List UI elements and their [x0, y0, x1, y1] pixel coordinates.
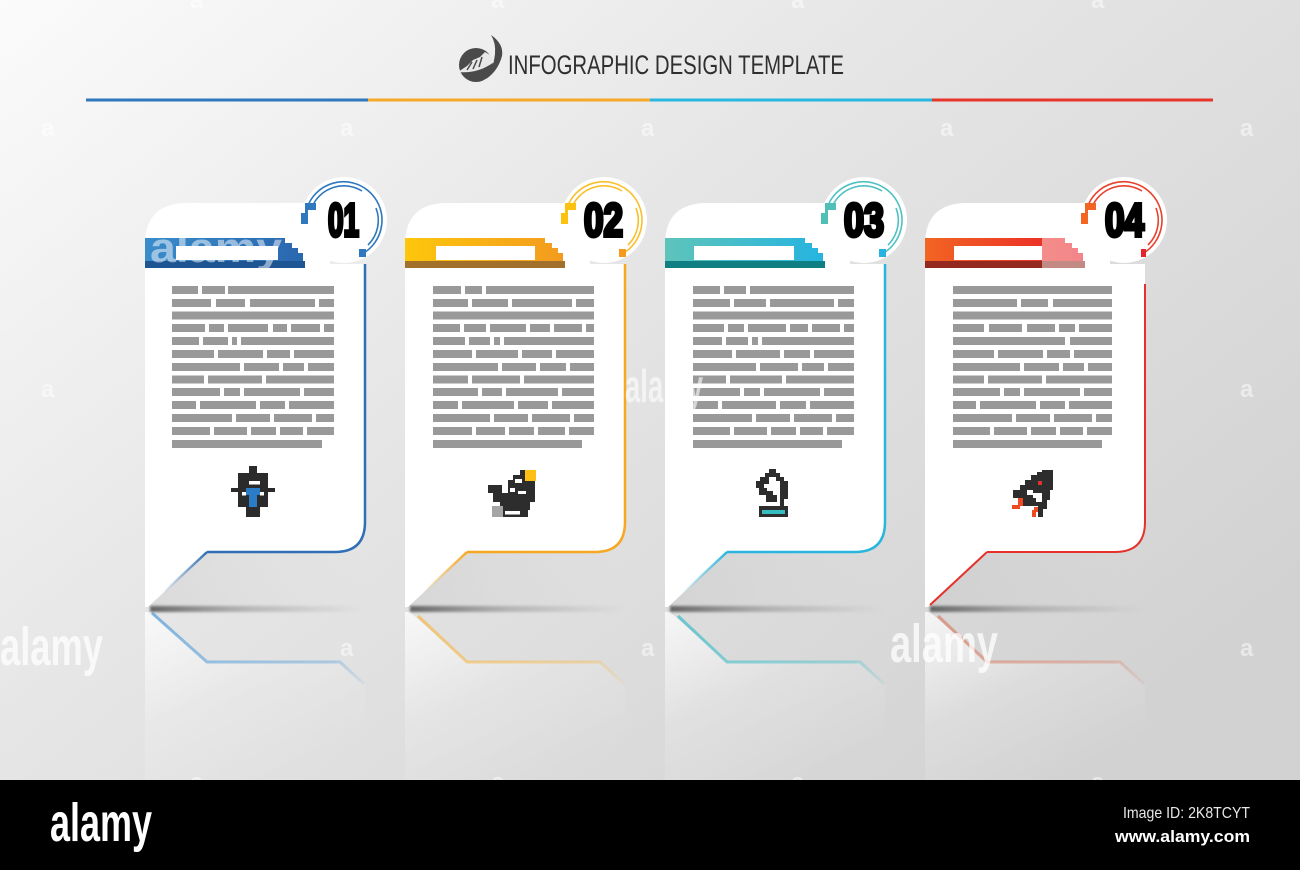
icon: chess knight — [756, 469, 788, 517]
badge circle — [561, 177, 647, 263]
number 01: 01 — [328, 194, 359, 246]
badge arcs — [1087, 182, 1162, 254]
title: INFOGRAPHIC DESIGN TEMPLATE — [508, 50, 844, 80]
text block — [953, 290, 1112, 444]
panel: step 04 — [925, 177, 1167, 780]
watermark: small marks: a — [1240, 115, 1254, 142]
panel: step 01 — [145, 177, 387, 699]
number 03: 03 — [844, 194, 884, 246]
watermark: left: alamy — [0, 617, 103, 677]
watermark: small marks: a — [340, 115, 354, 142]
badge end mark — [879, 249, 886, 257]
number 02: 02 — [584, 194, 623, 246]
image id: Image ID: 2K8TCYT — [1123, 805, 1250, 822]
text block — [172, 290, 334, 444]
footer bar — [0, 780, 1300, 870]
badge circle — [821, 177, 907, 263]
text block — [433, 290, 594, 444]
card tail outline — [930, 552, 987, 605]
badge arcs — [567, 182, 642, 254]
card outline — [467, 264, 625, 552]
badge end mark — [619, 249, 626, 257]
ribbon — [925, 238, 1085, 268]
watermark: small marks: a — [41, 115, 55, 142]
watermark: centre: alamy — [625, 360, 703, 412]
card outline — [987, 284, 1145, 552]
shadow and reflection — [145, 558, 364, 699]
text block — [693, 290, 854, 444]
icon: title logo — [458, 35, 502, 82]
card — [405, 203, 625, 607]
badge pixel marks — [561, 203, 576, 224]
card outline — [207, 264, 365, 552]
icon: rocket — [1012, 470, 1053, 517]
badge pixel marks — [821, 203, 836, 224]
shadow and reflection — [405, 573, 625, 709]
card — [145, 203, 365, 607]
badge pixel marks — [301, 203, 366, 257]
header — [86, 35, 1213, 102]
card tail outline — [410, 552, 467, 605]
shadow and reflection — [925, 603, 1144, 720]
badge circle — [1081, 177, 1167, 263]
header rule — [86, 98, 1213, 102]
badge arcs — [307, 182, 382, 254]
ribbon — [665, 238, 825, 268]
watermark: small marks: a — [340, 635, 354, 662]
watermark: small marks: a — [41, 376, 55, 403]
watermark: small marks: a — [940, 115, 954, 142]
watermark: lower right: alamy — [890, 614, 998, 674]
footer logo: alamy — [50, 793, 152, 853]
card tail outline — [670, 552, 727, 605]
watermark: small marks: a — [190, 769, 204, 796]
watermark: small marks: a — [641, 115, 655, 142]
watermark: ribbon: alamy — [150, 224, 283, 271]
card outline — [727, 264, 885, 552]
card tail outline — [150, 552, 207, 605]
shadow and reflection — [665, 590, 885, 716]
watermark: small marks: a — [1240, 635, 1254, 662]
badge end mark — [1141, 249, 1146, 257]
panel: step 02 — [405, 177, 647, 709]
card — [925, 203, 1145, 607]
ribbon — [405, 238, 565, 268]
website: www.alamy.com — [1114, 827, 1250, 846]
watermark: small marks: a — [791, 769, 805, 796]
watermark: small marks: a — [1091, 769, 1105, 796]
card — [665, 203, 885, 607]
watermark: small marks: a — [641, 635, 655, 662]
watermark: small marks: a — [491, 769, 505, 796]
badge arcs — [827, 182, 902, 254]
panel: step 03 — [665, 177, 907, 716]
icon: figure — [231, 466, 275, 517]
badge pixel marks — [1081, 203, 1096, 224]
number 04: 04 — [1105, 194, 1144, 246]
badge circle — [301, 177, 387, 263]
ribbon — [145, 238, 305, 268]
icon: satellite dish — [488, 470, 536, 517]
watermark: small marks: a — [1240, 376, 1254, 403]
